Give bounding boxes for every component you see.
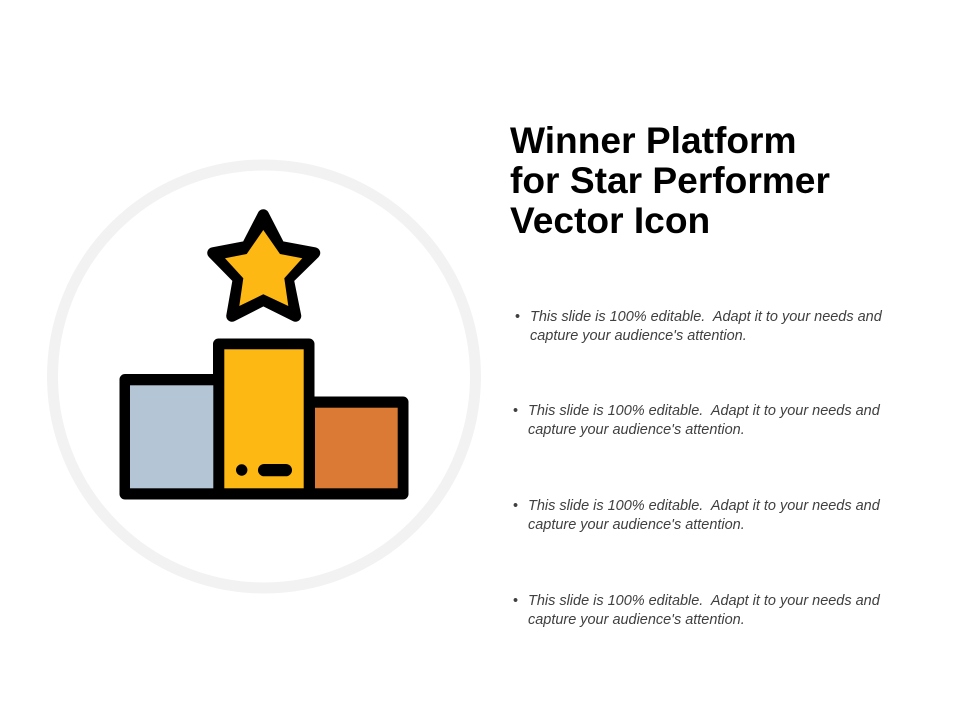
background ring bbox=[52, 165, 476, 588]
centre step dash bbox=[258, 464, 292, 476]
centre step dot bbox=[236, 464, 247, 476]
bullet 4: capture your audience's attention. bbox=[528, 612, 745, 628]
title: Vector Icon bbox=[510, 199, 710, 241]
right step bbox=[315, 408, 398, 488]
icon: star bbox=[213, 215, 314, 316]
icon: podium bbox=[120, 338, 408, 500]
bullet 1 bbox=[515, 309, 882, 344]
bullet 2 bbox=[513, 403, 880, 438]
bullet 1: capture your audience's attention. bbox=[530, 328, 747, 344]
centre step bbox=[224, 349, 304, 488]
star fill bbox=[225, 230, 302, 306]
bullet 3: This slide is 100% editable. Adapt it to your needs and bbox=[528, 498, 880, 514]
star outline bbox=[213, 215, 314, 316]
bullet 2: This slide is 100% editable. Adapt it to your needs and bbox=[528, 403, 880, 419]
bullet 4 bbox=[513, 593, 880, 628]
slide: • bbox=[513, 403, 518, 419]
title bbox=[510, 119, 830, 241]
bullet 3: capture your audience's attention. bbox=[528, 516, 745, 532]
title: for Star Performer bbox=[510, 159, 830, 201]
slide: • bbox=[515, 309, 520, 325]
podium black silhouette bbox=[120, 338, 408, 500]
bullet 4: This slide is 100% editable. Adapt it to your needs and bbox=[528, 593, 880, 609]
bullet 2: capture your audience's attention. bbox=[528, 422, 745, 438]
slide: • bbox=[513, 593, 518, 609]
slide: • bbox=[513, 498, 518, 514]
bullet 1: This slide is 100% editable. Adapt it to your needs and bbox=[530, 309, 882, 325]
bullet 3 bbox=[513, 498, 880, 532]
title: Winner Platform bbox=[510, 119, 796, 161]
left step bbox=[130, 385, 213, 488]
